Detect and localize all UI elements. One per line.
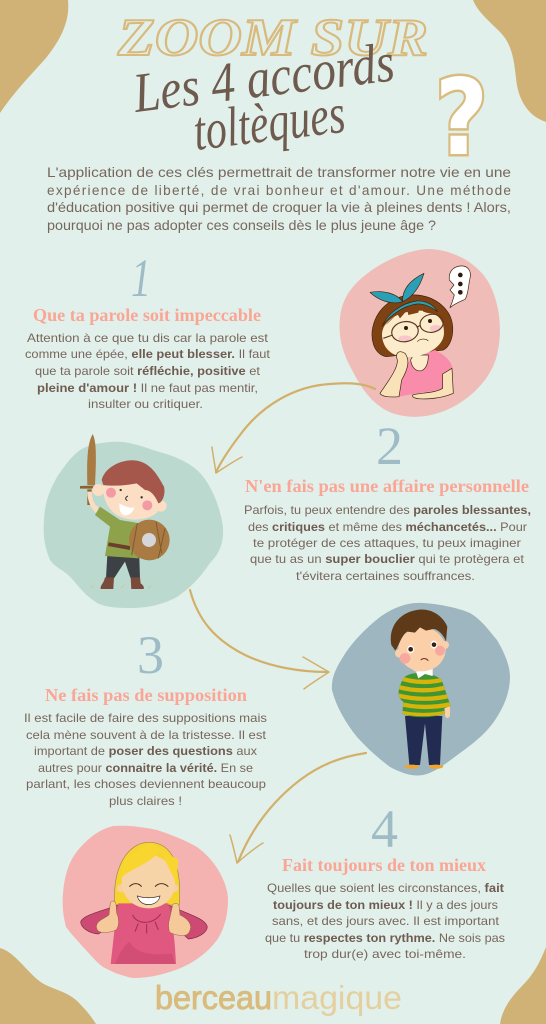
intro paragraph <box>47 165 511 233</box>
body text 2 <box>244 503 531 583</box>
logo: berceaumagique: magique <box>272 979 402 1016</box>
heading 1: Que ta parole soit impeccable <box>33 305 261 325</box>
body text 1: que ta parole soit réfléchie, positive et <box>35 364 261 378</box>
body text 2: Parfois, tu peux entendre des paroles blessantes, <box>244 503 531 517</box>
body text 4 <box>265 881 505 961</box>
corner shape: bottom left <box>0 948 96 1024</box>
body text 3: plus claires ! <box>109 794 182 808</box>
blob: green behind knight boy <box>44 442 223 608</box>
blob: pink behind thinking girl <box>340 249 500 417</box>
logo: berceaumagique: berceau <box>155 979 272 1016</box>
heading 4: Fait toujours de ton mieux <box>282 855 486 875</box>
section 3 <box>24 625 267 808</box>
section 1 <box>25 248 271 411</box>
body text 4: Quelles que soient les circonstances, fait <box>267 881 504 895</box>
arrow: from section 1 to section 2 <box>212 383 375 473</box>
title: zoom sur: ZOOM SUR <box>117 9 428 67</box>
title: les 4 accords: Les 4 accords <box>129 31 398 125</box>
body text 2: t'évitera certaines souffrances. <box>296 569 475 583</box>
body text 3: cela mène souvent à de la tristesse. Il est <box>26 728 267 742</box>
illustration: worried boy in striped sweater <box>391 610 452 769</box>
body text 1: comme une épée, elle peut blesser. Il faut <box>25 347 271 361</box>
number 3: 3 <box>137 625 164 685</box>
corner shape: top right <box>473 0 546 122</box>
illustration: thinking girl <box>370 266 470 399</box>
body text 3: autres pour connaitre la vérité. En se <box>38 761 253 775</box>
intro paragraph: expérience de liberté, de vrai bonheur et d'amour. Une méthode <box>47 183 511 198</box>
body text 2: que tu as un super bouclier qui te protègera et <box>250 552 525 566</box>
body text 1 <box>25 331 271 411</box>
number 2: 2 <box>376 416 403 476</box>
body text 4: trop dur(e) avec toi-même. <box>304 947 466 961</box>
body text 1: insulter ou critiquer. <box>88 397 203 411</box>
illustration: knight boy with sword and shield <box>80 434 170 589</box>
body text 3: important de poser des questions aux <box>34 744 257 758</box>
number 4: 4 <box>371 799 398 859</box>
illustration: blond girl with thumbs up <box>81 842 207 964</box>
body text 3 <box>24 711 267 808</box>
body text 4: sans, et des jours avec. Il est important <box>272 914 500 928</box>
body text 3: parlant, les choses deviennent beaucoup <box>26 777 266 791</box>
body text 3: Il est facile de faire des suppositions mais <box>24 711 267 725</box>
icon: question mark: ? <box>435 57 488 179</box>
blob: blue behind worried boy <box>332 603 510 775</box>
intro paragraph: L'application de ces clés permettrait de transformer notre vie en une <box>47 165 511 180</box>
arrow: from section 2 to section 3 <box>190 590 329 689</box>
blob: pink behind blond girl <box>63 826 228 978</box>
number 1: 1 <box>131 248 151 308</box>
section 4 <box>265 799 505 961</box>
heading 3: Ne fais pas de supposition <box>45 685 247 705</box>
body text 1: pleine d'amour ! Il ne faut pas mentir, <box>37 381 258 395</box>
body text 2: des critiques et même des méchancetés... Pour <box>248 520 527 534</box>
body text 2: te protéger de ces attaques, tu peux imaginer <box>253 536 521 550</box>
body text 4: que tu respectes ton rythme. Ne sois pas <box>265 931 505 945</box>
arrow: from section 3 to section 4 <box>230 753 366 863</box>
heading 2: N'en fais pas une affaire personnelle <box>245 476 529 496</box>
corner shape: bottom right <box>500 947 546 1024</box>
body text 4: toujours de ton mieux ! Il y a des jours <box>273 898 498 912</box>
corner shape: top left <box>0 0 68 113</box>
section 2 <box>244 416 531 583</box>
title: toltèques: toltèques <box>190 83 348 163</box>
logo: berceaumagique <box>155 979 402 1016</box>
intro paragraph: pourquoi ne pas adopter ces conseils dès le plus jeune âge ? <box>47 218 436 233</box>
intro paragraph: d'éducation positive qui permet de croquer la vie à pleines dents ! Alors, <box>47 200 511 215</box>
body text 1: Attention à ce que tu dis car la parole est <box>27 331 269 345</box>
